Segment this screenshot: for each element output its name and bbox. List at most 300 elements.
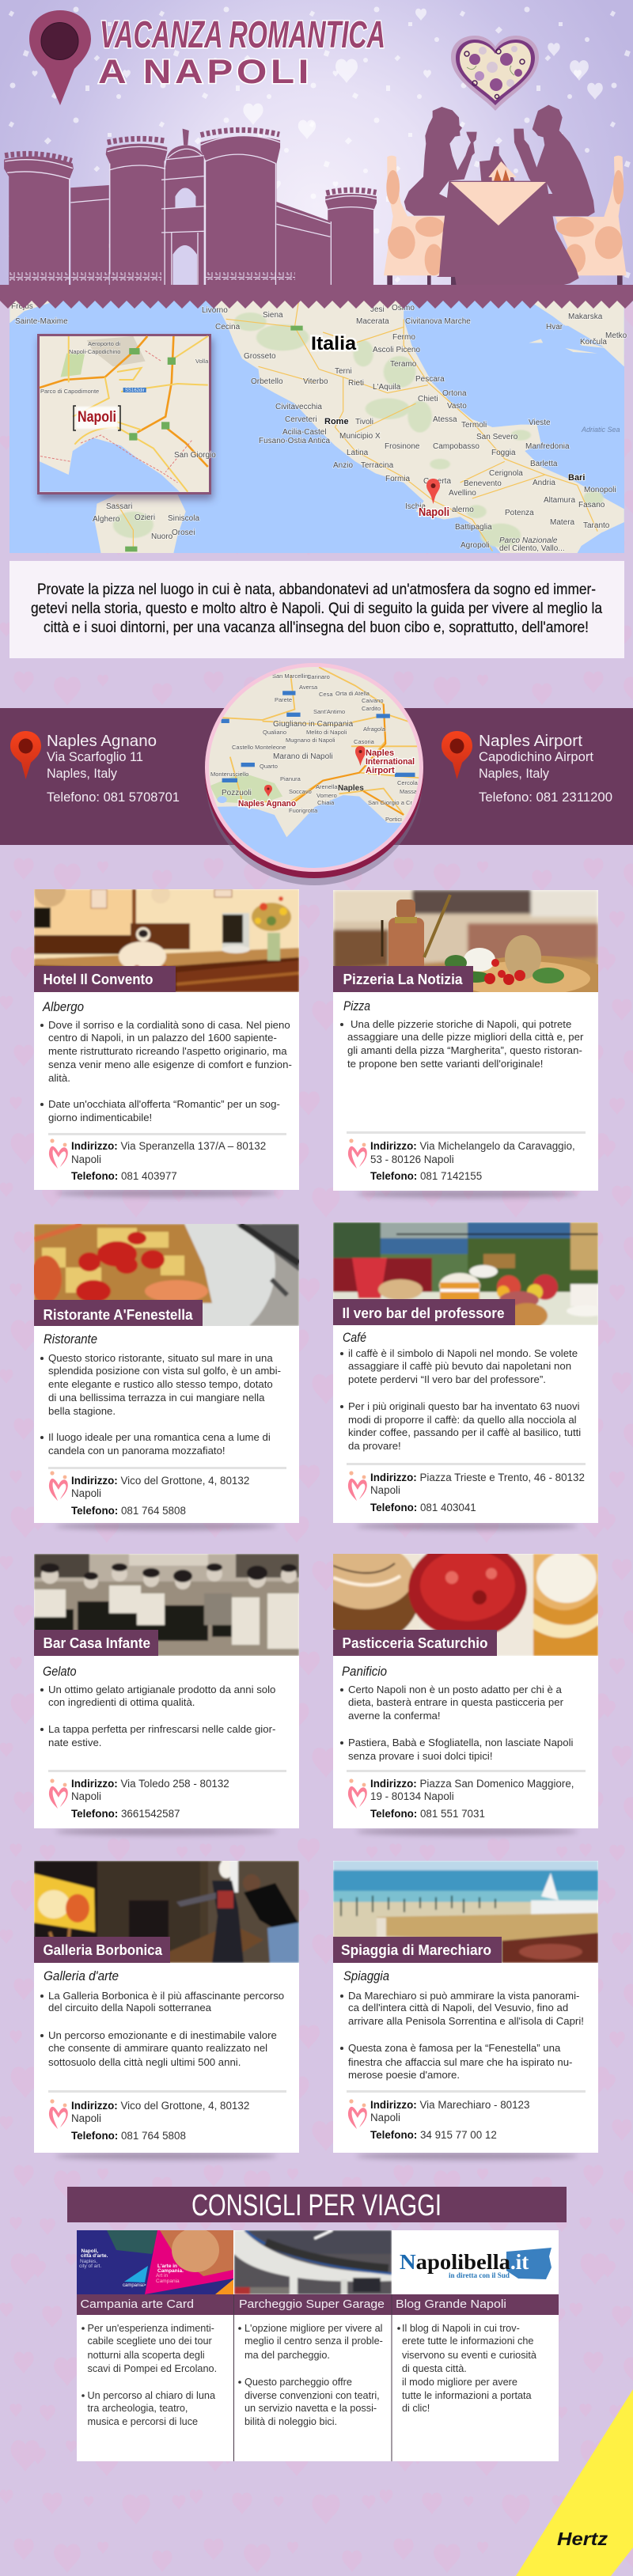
card: Pizzeria La Notizia: Pizza xyxy=(343,999,370,1013)
card: Il vero bar del professore: Café xyxy=(343,1331,366,1345)
description: Date un'occhiata all'offerta “Romantic” per un sog- xyxy=(48,1098,280,1110)
title: VACANZA ROMANTICA xyxy=(100,14,385,56)
panel: map of Italy: Cerveteri xyxy=(285,415,317,424)
description xyxy=(40,1019,292,1123)
description: sottosuolo della città negli ultimi 500 anni. xyxy=(48,2056,241,2068)
photo: campania arte card: Art in xyxy=(156,2273,169,2279)
contact: Napoli xyxy=(71,1154,101,1165)
panel: map of Italy: Nuoro xyxy=(151,532,173,541)
contact: Indirizzo: Via Toledo 258 - 80132 xyxy=(71,1778,229,1790)
header band xyxy=(0,285,633,301)
panel: map of Italy: Benevento xyxy=(464,479,502,488)
description: finestra che affaccia sul mare che ha ispirato nu- xyxy=(348,2056,572,2068)
card: Spiaggia di Marechiaro xyxy=(333,1861,598,2160)
panel: map of Italy: Ortona xyxy=(442,389,467,398)
inset label: Napoli: Napoli xyxy=(78,409,116,426)
contact: Indirizzo: Vico del Grottone, 4, 80132 xyxy=(71,1475,249,1487)
location: Naples Agnano: Naples, Italy xyxy=(47,766,117,781)
panel: map of Italy: Osimo xyxy=(392,304,415,313)
description: Una delle pizzerie storiche di Napoli, qui potrete xyxy=(351,1018,571,1030)
icon: couple heart xyxy=(348,1779,367,1809)
marker: Agnano: Naples Agnano xyxy=(238,799,296,809)
panel: map of Italy: Terracina xyxy=(361,461,394,470)
description: Il luogo ideale per una romantica cena a lume di xyxy=(48,1431,271,1443)
contact xyxy=(71,1778,229,1820)
description xyxy=(40,1684,275,1748)
card: Galleria Borbonica xyxy=(34,1859,299,2160)
tip: Blog Grande Napoli: di questa città. xyxy=(402,2363,467,2374)
photo: hotel reception xyxy=(34,889,299,992)
tip: Campania arte Card: Un percorso al chiaro di luna xyxy=(87,2390,216,2401)
title bar xyxy=(34,1937,170,1963)
circular area map: Mugnano di Napoli xyxy=(286,737,335,744)
panel: map of Italy: Frosinone xyxy=(385,442,420,451)
icon: couple heart xyxy=(348,2099,367,2129)
panel: map of Italy: Tivoli xyxy=(355,418,373,426)
panel: map of Italy: Ascoli Piceno xyxy=(373,346,420,354)
panel: map of Italy: Battipaglia xyxy=(455,523,492,532)
circular area map: Cardito xyxy=(362,705,381,712)
panel: map of Italy: del Cilento, Vallo... xyxy=(499,544,565,553)
description: splendida posizione con vista sul golfo, è un ambi- xyxy=(48,1365,281,1377)
inset map of Napoli: SS162dir xyxy=(125,388,145,393)
title bar: Pasticceria Scaturchio xyxy=(342,1635,487,1651)
contact: Indirizzo: Via Michelangelo da Caravaggio, xyxy=(370,1140,575,1152)
circular area map: San Marcellino xyxy=(272,672,312,680)
heading: consigli per viaggi xyxy=(67,2187,567,2222)
description: con ingredienti di ottima qualità. xyxy=(48,1696,195,1708)
panel: map of Italy: Atessa xyxy=(433,415,457,424)
map marker: Napoli xyxy=(419,479,449,519)
title: A NAPOLI xyxy=(98,53,313,91)
description: senza provare i suoi dolci tipici! xyxy=(348,1750,493,1762)
contact: 53 - 80126 Napoli xyxy=(370,1154,454,1165)
card: Spiaggia di Marechiaro: Spiaggia xyxy=(343,1969,389,1983)
castle silhouette xyxy=(4,129,377,286)
circular area map: Melito di Napoli xyxy=(306,729,347,736)
card: Bar Casa Infante: Gelato xyxy=(43,1665,76,1679)
description: Un ottimo gelato artigianale prodotto da anni solo xyxy=(48,1684,275,1695)
circular area map: Afragola xyxy=(363,725,386,733)
tip: Parcheggio Super Garage: meglio il centro senza il proble- xyxy=(244,2335,383,2347)
location: Naples Airport xyxy=(442,731,612,805)
intro panel xyxy=(9,561,624,658)
location: Naples Agnano xyxy=(10,731,180,805)
panel: map of Italy: Orosei xyxy=(172,528,195,537)
contact: Telefono: 081 764 5808 xyxy=(71,1505,186,1517)
icon: red pin xyxy=(442,731,472,779)
description: senza venir meno alle esigenze di comfort e funzion- xyxy=(48,1059,292,1070)
photo: vintage gelato group xyxy=(34,1554,299,1656)
title bar: Galleria Borbonica xyxy=(43,1942,163,1958)
description: assaggiare una delle pizze migliori della città e, per xyxy=(347,1031,584,1043)
panel: map of Italy: Andria xyxy=(533,479,555,487)
description: merose poesie d'amore. xyxy=(348,2069,460,2081)
contact: Indirizzo: Vico del Grottone, 4, 80132 xyxy=(71,2100,249,2112)
photo: pasta plate xyxy=(34,1224,299,1326)
description xyxy=(340,1684,574,1762)
description: dieta, basterà entrare in questa pasticceria per xyxy=(348,1696,564,1708)
tip: Parcheggio Super Garage: bilità di noleggio bici. xyxy=(244,2416,337,2427)
logo: Napolibella.it xyxy=(400,2248,552,2279)
panel: map of Italy: Sainte-Maxime xyxy=(15,317,68,326)
inset map of Napoli xyxy=(37,334,216,499)
tip: Campania arte Card: tra archeologia, teatro, xyxy=(87,2403,188,2414)
tip: Parcheggio Super Garage: L'opzione migliore per vivere al xyxy=(244,2323,383,2334)
panel: map of Italy: Livorno xyxy=(202,306,228,315)
panel: travel tips table xyxy=(77,2228,559,2461)
icon: red pin xyxy=(10,731,41,779)
contact: Napoli xyxy=(71,1790,101,1802)
panel: map of Italy: Matera xyxy=(550,518,575,527)
circular area map: Monterusciello xyxy=(210,771,248,778)
location: Naples Agnano: Telefono: 081 5708701 xyxy=(47,790,180,805)
circular area map: Quarto xyxy=(260,763,278,770)
panel: map of Italy: Sassari xyxy=(106,502,132,511)
panel: map of Italy: Rome xyxy=(324,417,349,426)
panel: map of Italy: Vasto xyxy=(447,402,467,411)
description: di una bellissima terrazza in cui mangiare nella xyxy=(48,1392,265,1404)
photo: campania arte card: Napoli, xyxy=(81,2248,98,2254)
panel: map of Italy: Korčula xyxy=(580,338,607,347)
title bar: Hotel Il Convento xyxy=(43,972,154,987)
circular area map: Chiaia xyxy=(317,799,335,806)
table header band: Blog Grande Napoli xyxy=(396,2298,506,2311)
panel: map of Italy: Manfredonia xyxy=(525,442,570,451)
circular area map: San Giorgio a Cr xyxy=(368,799,412,806)
panel: map of Italy: Siniscola xyxy=(168,514,199,523)
tip: Parcheggio Super Garage: un servizio navetta e la possi- xyxy=(244,2403,377,2414)
photo: campania arte card xyxy=(77,2230,233,2294)
table header band: Parcheggio Super Garage xyxy=(239,2298,385,2311)
panel: map of Italy: Fusano-Ostia Antica xyxy=(259,437,330,445)
tip: Blog Grande Napoli: viservono su eventi e curiosità xyxy=(402,2350,537,2361)
icon: couple heart xyxy=(348,1138,367,1169)
icon: map pin xyxy=(29,10,91,105)
contact xyxy=(71,1475,249,1517)
castle frieze xyxy=(9,272,295,281)
panel: map of Italy: Taranto xyxy=(583,521,610,530)
description: La tappa perfetta per rinfrescarsi nelle calde gior- xyxy=(48,1723,275,1735)
panel: map of Italy: alerno xyxy=(452,506,474,514)
description: del circuito della Napoli sotterranea xyxy=(48,2002,212,2013)
tip: Blog Grande Napoli: di clic! xyxy=(402,2403,430,2414)
location: Naples Airport: Naples Airport xyxy=(479,733,582,750)
contact: Napoli xyxy=(71,2112,101,2124)
circular area map xyxy=(184,663,424,885)
tip: Parcheggio Super Garage: diverse convenzioni con teatri, xyxy=(244,2390,380,2401)
tip: Campania arte Card xyxy=(81,2323,217,2427)
panel: map of Italy: Macerata xyxy=(356,317,389,326)
inset map of Napoli: Aeroporto di xyxy=(88,340,120,347)
panel: map of Italy: Altamura xyxy=(544,496,575,505)
card: Pizzeria La Notizia xyxy=(333,890,618,1198)
description: assaggiare il caffè più bevuto dai napoletani non xyxy=(348,1360,571,1372)
description: ente elegante e rustico allo stesso tempo, dotato xyxy=(48,1378,273,1390)
panel: map of Italy: Cecina xyxy=(215,323,241,331)
title bar xyxy=(34,1300,203,1326)
panel: map of Italy: Cerignola xyxy=(489,469,523,478)
panel: map of Italy: Chieti xyxy=(418,395,438,403)
table header band xyxy=(77,2294,559,2315)
inset map of Napoli: Napoli-Capodichino xyxy=(69,348,120,355)
description: Questa zona è famosa per la “Fenestella” una xyxy=(348,2042,561,2054)
card: Ristorante A'Fenestella: Ristorante xyxy=(44,1332,97,1347)
circular area map: Orta di Atella xyxy=(335,690,370,697)
contact: 19 - 80134 Napoli xyxy=(370,1790,454,1802)
photo: campania arte card: città d'arte. xyxy=(81,2253,108,2259)
panel: map of Italy xyxy=(9,301,627,553)
card: Pasticceria Scaturchio xyxy=(316,1540,598,1835)
table header band: Campania arte Card xyxy=(81,2298,194,2311)
panel: map of Italy: Foggia xyxy=(491,449,516,457)
tip: Parcheggio Super Garage: ma del parcheggio. xyxy=(244,2350,330,2361)
photo: pastries xyxy=(333,1554,598,1656)
panel: map of Italy: Termoli xyxy=(461,421,487,430)
circular area map: Qualiano xyxy=(263,729,286,736)
title bar xyxy=(333,1299,515,1325)
photo: underground gallery xyxy=(34,1861,299,1963)
tip: Parcheggio Super Garage: Questo parcheggio offre xyxy=(244,2377,352,2388)
icon: heart pizza xyxy=(451,36,539,111)
dinner couple illustration xyxy=(384,105,627,286)
description: Certo Napoli non è un posto adatto per chi è a xyxy=(348,1684,562,1695)
panel: map of Italy: Civitavecchia xyxy=(275,403,322,411)
photo: pizzeria table xyxy=(333,890,598,992)
contact: Telefono: 081 764 5808 xyxy=(71,2130,186,2142)
circular area map: Naples xyxy=(338,784,364,793)
panel: map of Italy: Agropoli xyxy=(461,541,490,550)
panel: map of Italy: Rieti xyxy=(348,379,364,388)
panel: map of Italy: Grosseto xyxy=(244,352,276,361)
location: Naples Agnano: Via Scarfoglio 11 xyxy=(47,749,143,764)
contact xyxy=(370,1778,574,1820)
tip: Campania arte Card: scavi di Pompei ed Ercolano. xyxy=(87,2363,217,2374)
panel: map of Italy: Ozieri xyxy=(135,513,155,522)
icon: couple heart xyxy=(49,2099,68,2129)
panel: map of Italy: Monopoli xyxy=(584,486,616,494)
circular area map: Sant'Antimo xyxy=(313,708,345,715)
panel: map of Italy: Avellino xyxy=(449,489,476,498)
description: La Galleria Borbonica è il più affascinante percorso xyxy=(48,1990,284,2002)
panel: map of Italy: Alghero xyxy=(93,515,120,524)
contact: Indirizzo: Via Speranzella 137/A – 80132 xyxy=(71,1140,266,1152)
panel: map of Italy: Municipio X xyxy=(339,432,381,441)
title bar: Spiaggia di Marechiaro xyxy=(341,1942,491,1958)
marker: airport: International xyxy=(366,757,415,767)
card: Bar Casa Infante xyxy=(34,1554,299,1835)
description: centro di Napoli, in un palazzo del 1600 sapiente- xyxy=(48,1032,277,1044)
card: Hotel Il Convento xyxy=(34,875,299,1197)
tip: Campania arte Card: cabile scegliete uno dei tour xyxy=(87,2335,213,2347)
card: Galleria Borbonica: Galleria d'arte xyxy=(44,1969,119,1983)
photo: campania arte card: Campania. xyxy=(157,2268,184,2274)
tip: Blog Grande Napoli: il modo migliore per avere xyxy=(402,2377,517,2388)
icon: couple heart xyxy=(348,1471,367,1501)
address band xyxy=(0,708,633,845)
description: che consente di ammirare quanto realizzato nel xyxy=(48,2042,267,2054)
icon: couple heart xyxy=(49,1471,68,1501)
zigzag edge xyxy=(0,301,633,309)
description: candela con un panorama mozzafiato! xyxy=(48,1445,226,1457)
circular area map: Marano di Napoli xyxy=(273,752,333,761)
photo: beach xyxy=(333,1861,598,1963)
description xyxy=(340,1347,581,1452)
description: ca dell'intera città di Napoli, del Vesuvio, fino ad xyxy=(348,2002,568,2013)
tip: Blog Grande Napoli xyxy=(397,2323,537,2414)
title bar xyxy=(333,1630,497,1656)
photo: parking garage xyxy=(234,2230,392,2294)
photo: campania arte card: city of art. xyxy=(79,2263,101,2269)
description: Questo storico ristorante, situato sul mare in una xyxy=(48,1352,273,1364)
description: nate estive. xyxy=(48,1737,101,1748)
tip: Blog Grande Napoli: Il blog di Napoli in cui trov- xyxy=(402,2323,520,2334)
panel: map of Italy: Anzio xyxy=(333,461,353,470)
description: Pastiera, Babà e Sfogliatella, non lasciate Napoli xyxy=(348,1737,574,1748)
description: bella stagione. xyxy=(48,1405,116,1417)
circular area map: Carinaro xyxy=(307,673,330,680)
description: alità. xyxy=(48,1072,70,1084)
circular area map: Parete xyxy=(275,696,292,703)
logo: Napolibella.it: in diretta con il Sud xyxy=(449,2271,510,2279)
card: Il vero bar del professore xyxy=(333,1222,606,1530)
panel: map of Italy: Bari xyxy=(568,473,585,483)
marker: airport: Naples xyxy=(366,748,394,758)
description: averne la conferma! xyxy=(348,1710,441,1722)
title bar xyxy=(333,1937,502,1963)
contact: Telefono: 081 551 7031 xyxy=(370,1808,485,1820)
circular area map: Massa xyxy=(400,788,418,795)
description: gli amanti della pizza “Margherita”, questo ristoran- xyxy=(347,1044,582,1056)
location: Naples Airport: Capodichino Airport xyxy=(479,749,593,764)
contact: Indirizzo: Piazza San Domenico Maggiore, xyxy=(370,1778,574,1790)
circular area map: Soccavo xyxy=(289,788,312,795)
description: il caffè è il simbolo di Napoli nel mondo. Se volete xyxy=(348,1347,578,1359)
panel: map of Italy: Hvar xyxy=(546,323,563,331)
description: arrivare alla Penisola Sorrentina e all'isola di Capri! xyxy=(348,2015,584,2027)
location: Naples Agnano: Naples Agnano xyxy=(47,733,157,750)
title bar: Bar Casa Infante xyxy=(43,1635,150,1651)
title bar xyxy=(333,966,473,992)
description: Un percorso emozionante e di inestimabile valore xyxy=(48,2029,277,2041)
contact: Telefono: 081 403977 xyxy=(71,1170,177,1182)
description xyxy=(340,1990,584,2081)
circular area map: Cesa xyxy=(319,691,333,698)
panel: map of Italy: Acilia-Castel xyxy=(282,428,327,437)
panel: map of Italy: Parco Nazionale xyxy=(499,536,558,545)
photo: campania arte card: Naples, xyxy=(80,2259,97,2264)
icon: couple heart xyxy=(49,1138,68,1169)
tip: Campania arte Card: Per un'esperienza indimenti- xyxy=(87,2323,214,2334)
location: Naples Airport: Telefono: 081 2311200 xyxy=(479,790,612,805)
panel: map of Italy: L'Aquila xyxy=(373,383,401,392)
hertz corner: Hertz xyxy=(557,2529,608,2549)
heading: consigli per viaggi: CONSIGLI PER VIAGGI xyxy=(191,2189,442,2222)
panel: map of Italy: Adriatic Sea xyxy=(581,426,620,434)
marker: airport: Airport xyxy=(366,766,395,775)
contact: Indirizzo: Piazza Trieste e Trento, 46 - 80132 xyxy=(370,1472,585,1483)
circular area map: Castello Monteleone xyxy=(232,744,286,751)
description: te propone ben sette varianti dell'originale! xyxy=(347,1058,543,1070)
photo: campania arte card: Campania xyxy=(156,2279,180,2284)
description: Dove il sorriso e la cordialità sono di casa. Nel pieno xyxy=(48,1019,290,1031)
panel: map of Italy: Terni xyxy=(335,367,352,376)
contact: Napoli xyxy=(71,1487,101,1499)
panel: map of Italy: Viterbo xyxy=(303,377,328,386)
panel: map of Italy: Orbetello xyxy=(251,377,283,386)
intro panel: città e i suoi dintorni, per una vacanza all'insegna del buon cibo e, soprattutto, dell'amore! xyxy=(44,619,589,636)
contact: Napoli xyxy=(370,1484,400,1496)
panel: map of Italy: Vieste xyxy=(529,419,551,427)
location: Naples Airport: Naples, Italy xyxy=(479,766,549,781)
panel: map of Italy: Teramo xyxy=(390,360,417,369)
title bar: Pizzeria La Notizia xyxy=(343,972,463,987)
contact: Telefono: 34 915 77 00 12 xyxy=(370,2129,497,2141)
photo: campania arte card: L'arte in xyxy=(157,2263,177,2269)
circular area map: Fuorigrotta xyxy=(289,807,318,814)
contact: Telefono: 3661542587 xyxy=(71,1808,180,1820)
intro panel: Provate la pizza nel luogo in cui è nata, abbandonatevi ad un'atmosfera da sogno ed immer- xyxy=(37,581,596,598)
inset map of Napoli: Volla xyxy=(195,358,209,365)
panel: map of Italy: Formia xyxy=(385,475,411,483)
logo: Napolibella.it: .it xyxy=(510,2250,529,2274)
panel: map of Italy: Makarska xyxy=(568,313,603,321)
contact xyxy=(71,1140,266,1182)
photo: terrace breakfast xyxy=(333,1222,598,1325)
logo: Napolibella.it: Napolibella xyxy=(400,2250,511,2274)
tip: Blog Grande Napoli: tutte le informazioni a portata xyxy=(402,2390,533,2401)
contact: Indirizzo: Via Marechiaro - 80123 xyxy=(370,2099,529,2111)
tip: Blog Grande Napoli: erete tutte le informazioni che xyxy=(402,2335,533,2347)
circular area map: Cercola xyxy=(397,779,419,786)
description: kinder coffee, passando per il caffè al basilico, tutti xyxy=(348,1426,581,1438)
contact xyxy=(71,2100,249,2142)
panel: map of Italy: Fasano xyxy=(578,501,605,510)
description: giorno indimenticabile! xyxy=(48,1112,152,1123)
panel: map of Italy: Fermo xyxy=(392,333,415,342)
title xyxy=(98,14,385,91)
description xyxy=(40,1352,281,1457)
tip: Campania arte Card: notturni alla scoperta degli xyxy=(87,2350,205,2361)
icon: couple heart xyxy=(49,1779,68,1809)
panel: map of Italy: Metko xyxy=(605,331,627,340)
map marker: Napoli: Napoli xyxy=(419,506,449,519)
description: da provare! xyxy=(348,1440,401,1452)
circular area map: Pozzuoli xyxy=(222,789,252,797)
circular area map: Caivano xyxy=(362,697,384,704)
circular area map: Giugliano in Campania xyxy=(273,720,354,729)
panel: map of Italy: Jesi xyxy=(370,305,385,314)
map label: Italia: Italia xyxy=(311,333,357,354)
title bar: Il vero bar del professore xyxy=(342,1305,505,1321)
contact: Napoli xyxy=(370,2112,400,2123)
card: Pasticceria Scaturchio: Panificio xyxy=(342,1665,387,1679)
panel: map of Italy: Caserta xyxy=(423,477,451,486)
description xyxy=(40,1990,284,2068)
card: Ristorante A'Fenestella xyxy=(30,1184,299,1530)
title bar: Ristorante A'Fenestella xyxy=(43,1307,193,1323)
title bar xyxy=(34,1630,158,1656)
circular area map: Arenella xyxy=(316,783,338,790)
description xyxy=(340,1018,584,1070)
panel: map of Italy: Fréjus xyxy=(11,302,33,311)
description: Per i più originali questo bar ha inventato 63 nuovi xyxy=(348,1400,580,1412)
inset map of Napoli: Parco di Capodimonte xyxy=(40,388,99,395)
tip: Campania arte Card: musica e percorsi di luce xyxy=(87,2416,198,2427)
description: Da Marechiaro si può ammirare la vista panorami- xyxy=(348,1990,579,2002)
panel: map of Italy: Civitanova Marche xyxy=(405,317,471,326)
photo: campania arte card: campania> xyxy=(123,2283,146,2288)
